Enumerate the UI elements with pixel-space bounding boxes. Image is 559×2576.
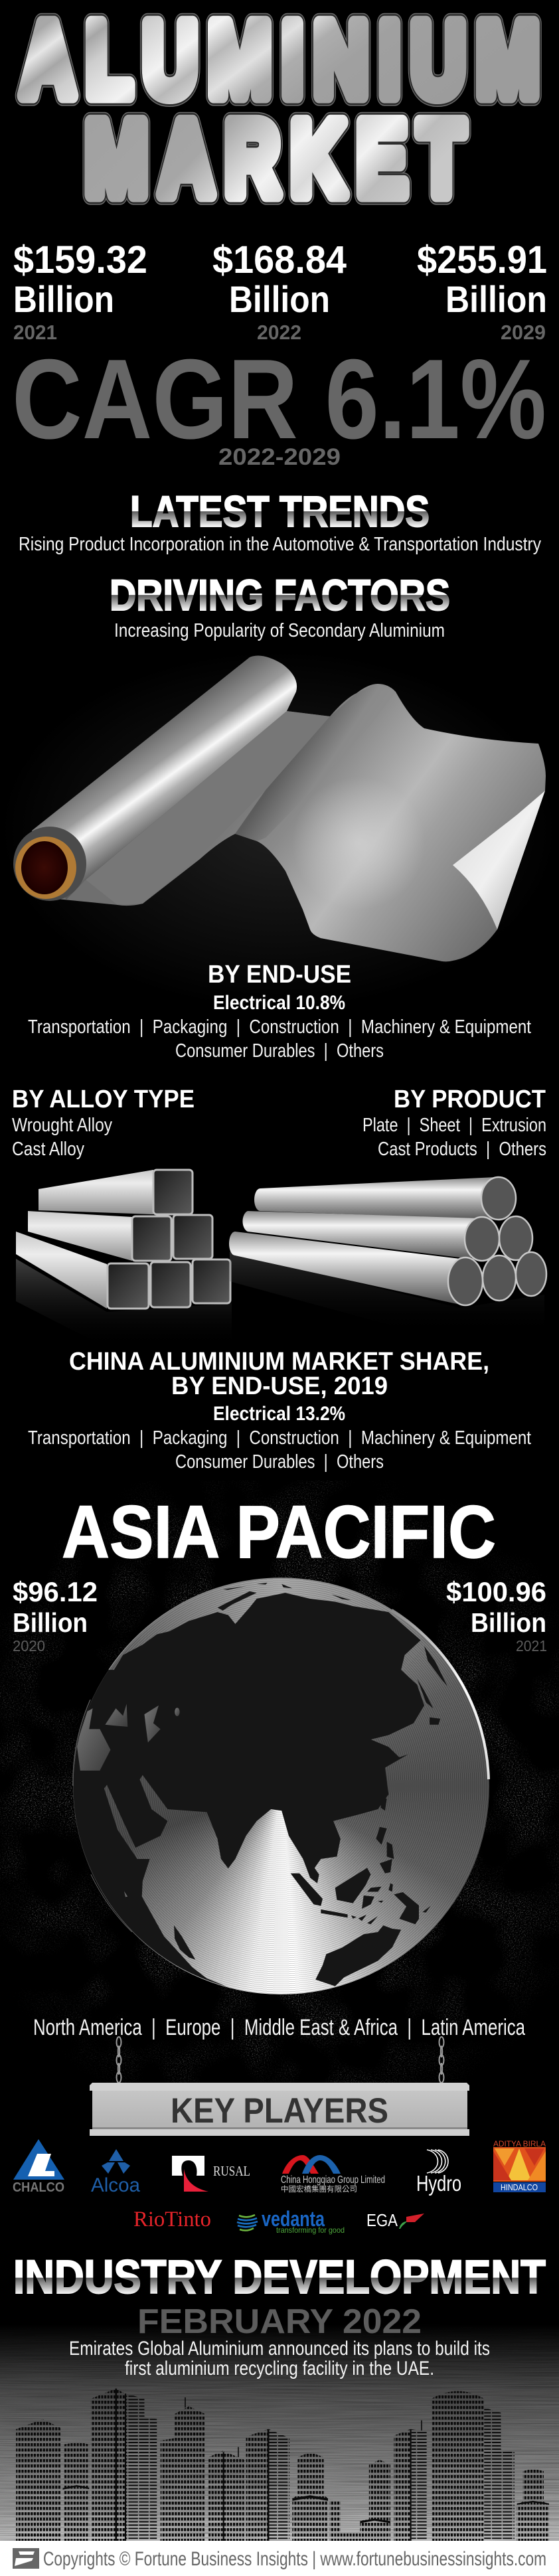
section: China market share: Consumer Durables | Others <box>175 1451 384 1473</box>
segment: by alloy type <box>12 1086 195 1160</box>
segment: by alloy type: Wrought Alloy <box>12 1115 112 1136</box>
logo: Hindalco: HINDALCO <box>501 2182 538 2192</box>
title line: MARKET: MARKET <box>85 100 465 217</box>
stat 2022: 2022 <box>257 321 301 344</box>
section: China market share: CHINA ALUMINIUM MARKET SHARE, <box>69 1348 489 1376</box>
logo: Hydro: Hydro <box>416 2171 461 2196</box>
section: China market share <box>28 1348 531 1473</box>
stat 2029 <box>417 238 547 344</box>
sign: key players: KEY PLAYERS <box>171 2091 388 2131</box>
segment: by alloy type: BY ALLOY TYPE <box>12 1086 195 1113</box>
stat: Asia Pacific 2021: 2021 <box>516 1637 547 1654</box>
section: industry development background <box>0 2324 559 2541</box>
logo: Vedanta: transforming for good <box>276 2225 345 2235</box>
illustration: aluminium foil roll <box>0 651 558 1009</box>
title line: ALUMINIUM: ALUMINIUM <box>21 1 539 118</box>
title <box>21 1 539 217</box>
footer logo <box>13 2548 39 2569</box>
date: FEBRUARY 2022 <box>137 2302 422 2341</box>
continents <box>73 1583 447 1986</box>
logo: Rusal <box>172 2156 250 2192</box>
stat: Asia Pacific 2021: $100.96 <box>446 1576 546 1607</box>
illustration: metal globe <box>72 1577 490 1994</box>
stat: Asia Pacific 2020: $96.12 <box>13 1576 98 1607</box>
logo: Alcoa: Alcoa <box>91 2174 140 2196</box>
footer bar <box>0 2541 559 2576</box>
metal beam <box>90 2083 469 2091</box>
logo: China Hongqiao <box>281 2155 385 2194</box>
segment: by product <box>362 1086 546 1160</box>
foil curl <box>453 791 545 929</box>
heading: driving factors: DRIVING FACTORS <box>110 570 450 619</box>
section: China market share: Electrical 13.2% <box>213 1403 345 1425</box>
development text: first aluminium recycling facility in the UAE. <box>125 2358 434 2379</box>
heading: latest trends: LATEST TRENDS <box>130 487 430 536</box>
segment: by end-use <box>28 961 531 1062</box>
stat: Asia Pacific 2020 <box>13 1576 98 1654</box>
segment: by end-use: BY END-USE <box>208 961 351 989</box>
stat 2029: $255.91 <box>417 238 547 282</box>
market size stats <box>13 238 547 344</box>
development text <box>69 2338 490 2379</box>
title line: ALUMINIUM: ALUMINIUM <box>21 1 539 118</box>
logo: China Hongqiao: China Hongqiao Group Limited <box>281 2174 385 2186</box>
driving factors text: Increasing Popularity of Secondary Aluminium <box>114 620 445 641</box>
title line: ALUMINIUM: ALUMINIUM <box>21 1 539 118</box>
hanging chains <box>117 2037 443 2083</box>
arctic and pacific islands <box>218 1583 447 1859</box>
logo: Hindalco <box>493 2139 546 2192</box>
stat 2029: Billion <box>445 278 547 320</box>
illustration: round tubes <box>229 1177 546 1334</box>
stat 2022: $168.84 <box>212 238 347 282</box>
segment: by product: BY PRODUCT <box>394 1086 546 1113</box>
stat 2021: 2021 <box>13 321 57 344</box>
stat 2021: $159.32 <box>13 238 147 282</box>
stat: Asia Pacific 2020: Billion <box>13 1607 88 1638</box>
illustration: city skyline <box>16 2389 549 2541</box>
logo: Chalco: CHALCO <box>13 2180 64 2195</box>
segment: by alloy type: Cast Alloy <box>12 1139 84 1160</box>
stat 2022 <box>212 238 347 344</box>
stat 2022: Billion <box>229 278 330 320</box>
logo: EGA: EGA <box>366 2210 398 2230</box>
logo: Rusal: RUSAL <box>213 2163 250 2179</box>
CAGR period: 2022-2029 <box>218 444 341 470</box>
segment: by end-use: Consumer Durables | Others <box>175 1040 384 1062</box>
foil sheet <box>57 684 546 961</box>
logo: Vedanta: vedanta <box>262 2207 325 2231</box>
foil roll body <box>32 656 297 900</box>
logo: Hydro <box>416 2150 461 2196</box>
inland seas <box>76 1704 180 1771</box>
stat: Asia Pacific 2021 <box>446 1576 547 1654</box>
logo: Vedanta <box>237 2207 345 2235</box>
roll core <box>15 837 76 899</box>
stat 2021: Billion <box>13 278 114 320</box>
stat: Asia Pacific 2020: 2020 <box>13 1637 45 1654</box>
logo: EGA <box>366 2210 424 2230</box>
sign: key players <box>90 2037 469 2136</box>
segment: by end-use: Electrical 10.8% <box>213 992 345 1014</box>
stat 2029: 2029 <box>501 321 546 344</box>
logo: Chalco <box>13 2139 64 2195</box>
stat 2021 <box>13 238 147 344</box>
illustration: square tubes <box>16 1170 232 1348</box>
stat: Asia Pacific 2021: Billion <box>471 1607 546 1638</box>
logo: Hindalco: ADITYA BIRLA <box>493 2139 546 2148</box>
section: China market share: BY END-USE, 2019 <box>171 1372 388 1400</box>
heading: Asia Pacific: ASIA PACIFIC <box>62 1490 496 1573</box>
logo: Rio Tinto: RioTinto <box>133 2208 211 2231</box>
title line: MARKET: MARKET <box>85 100 465 217</box>
title line: MARKET: MARKET <box>85 100 465 217</box>
globe rim <box>392 1610 489 1779</box>
logo: Alcoa <box>91 2149 140 2196</box>
logo: China Hongqiao: 中國宏橋集團有限公司 <box>281 2184 357 2194</box>
